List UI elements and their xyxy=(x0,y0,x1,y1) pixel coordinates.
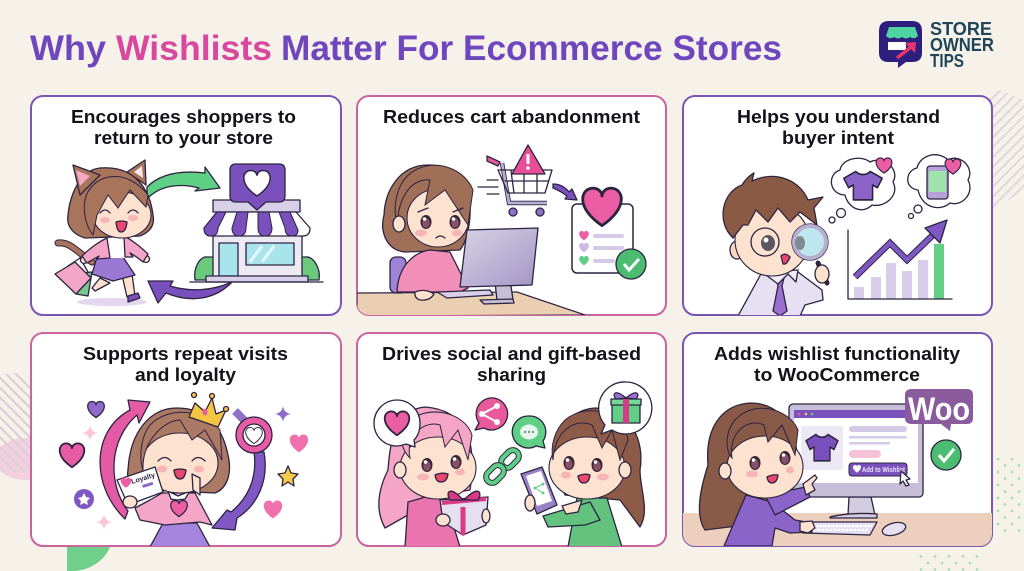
panel: WooCommerce functionality xyxy=(683,333,992,546)
thought bubble: phone xyxy=(908,155,970,218)
icon: keyboard and mouse xyxy=(803,520,907,538)
character: cat girl shopper xyxy=(55,160,153,306)
character: boy with magnifier xyxy=(723,173,829,316)
panel: social and gift sharing xyxy=(357,333,666,547)
heading: encourages shoppers: Encourages shoppers to xyxy=(71,106,296,127)
speech bubble: heart xyxy=(374,400,420,447)
title: Matter For Ecommerce Stores xyxy=(281,29,782,68)
character: girl pointing at screen xyxy=(699,403,817,546)
character: girl with crown and loyalty card xyxy=(117,392,229,547)
icon: wishlist card xyxy=(572,188,646,279)
character: girl with crown and loyalty card: Loyalty xyxy=(131,472,156,486)
title xyxy=(30,29,782,68)
heading: encourages shoppers: return to your store xyxy=(94,127,273,148)
heading: buyer intent: Helps you understand xyxy=(737,106,940,127)
arrow: pink loop xyxy=(100,400,150,519)
heading: WooCommerce xyxy=(714,343,961,385)
icon: chain link xyxy=(484,448,521,485)
arrow: purple loop xyxy=(212,452,265,530)
button: add to wishlist: Add to Wishlist xyxy=(862,467,906,474)
heading: repeat visits xyxy=(83,343,288,385)
icon: store with heart sign xyxy=(190,164,323,282)
heading: repeat visits: Supports repeat visits xyxy=(83,343,288,364)
logo: Store Owner Tips: OWNER xyxy=(930,34,994,55)
speech bubble: share xyxy=(475,398,508,430)
badge: Woo: Woo xyxy=(908,391,970,427)
chart: rising bars and arrow xyxy=(848,220,952,299)
logo: Store Owner Tips: TIPS xyxy=(930,50,964,71)
icon: cursor xyxy=(900,471,910,486)
speech bubble: chat xyxy=(512,416,546,448)
arrow: purple return xyxy=(148,281,232,303)
icon: heart ring xyxy=(235,411,272,453)
panel: encourages shoppers to return xyxy=(31,96,341,315)
character: pink-haired girl with gift xyxy=(379,407,490,547)
speech bubble: gift xyxy=(599,382,652,434)
heading: social sharing: sharing xyxy=(477,364,546,385)
logo: Store Owner Tips: STORE xyxy=(930,18,992,39)
logo: Store Owner Tips xyxy=(879,18,994,71)
heading: encourages shoppers xyxy=(71,106,296,148)
desk xyxy=(683,513,992,546)
heading: cart abandonment: Reduces cart abandonment xyxy=(383,106,640,127)
heading: buyer intent: buyer intent xyxy=(782,127,894,148)
icon: shopping cart with warning xyxy=(478,145,552,216)
arrow: green to store xyxy=(147,167,220,199)
thought bubble: t-shirt xyxy=(829,158,895,223)
arrow: cart to wishlist xyxy=(553,184,577,200)
heading: WooCommerce: Adds wishlist functionality xyxy=(714,343,961,364)
heading: WooCommerce: to WooCommerce xyxy=(754,364,920,385)
icon: green check xyxy=(931,440,961,470)
icon: desktop monitor with product page xyxy=(789,404,923,518)
heading: social sharing xyxy=(382,343,641,385)
heading: buyer intent xyxy=(737,106,940,148)
heading: repeat visits: and loyalty xyxy=(135,364,237,385)
panel: repeat visits and loyalty xyxy=(31,333,341,547)
panel: reduces cart abandonment xyxy=(357,96,666,316)
title: Wishlists xyxy=(116,29,272,68)
heading: social sharing: Drives social and gift-based xyxy=(382,343,641,364)
title: Why xyxy=(30,29,107,68)
decorations: hearts, stars, sparkles xyxy=(60,401,308,530)
illustration: desk and worried shopper xyxy=(357,165,585,316)
panel: understand buyer intent xyxy=(683,96,992,316)
character: brown-haired girl with phone xyxy=(521,408,644,547)
